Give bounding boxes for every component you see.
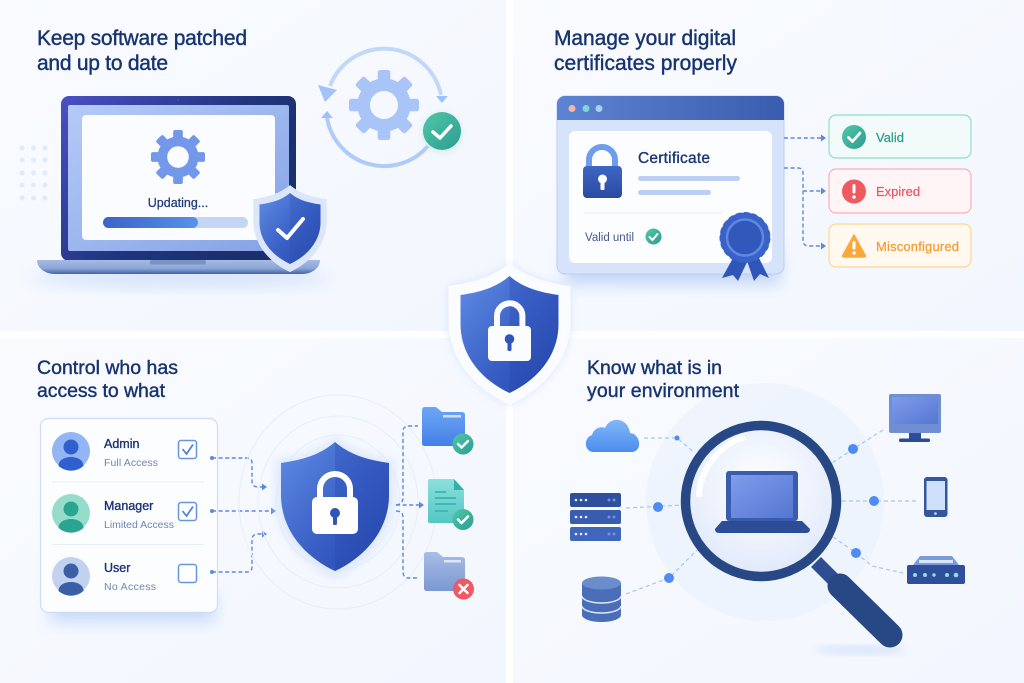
- icon: server rack: [570, 493, 621, 541]
- valid until label: Valid until: [585, 232, 634, 244]
- connectors: users to shield: [210, 456, 276, 574]
- row: manager: [52, 494, 196, 533]
- panel: control access: [37, 357, 474, 622]
- heading: know your environment: Know what is in: [587, 357, 722, 379]
- status: expired: [829, 169, 971, 213]
- status: valid: [829, 115, 971, 158]
- panel: know your environment: [570, 357, 965, 654]
- certificate title: Certificate: [638, 150, 710, 167]
- row: manager: Limited Access: [104, 519, 174, 531]
- shield rings: [239, 395, 437, 609]
- icon: database: [582, 576, 621, 622]
- central shield with lock: [448, 263, 571, 405]
- heading: control access: access to what: [37, 380, 166, 402]
- updating label: Updating...: [148, 196, 208, 210]
- status: valid: Valid: [876, 130, 904, 145]
- row: user: [52, 557, 196, 596]
- icon: cloud: [586, 420, 639, 452]
- icon: updating gear: [151, 130, 205, 184]
- row: user: No Access: [104, 581, 156, 593]
- device connectors: [626, 430, 919, 594]
- icon: denied folder: [424, 552, 474, 600]
- laptop ground shadow: [30, 269, 330, 287]
- status: misconfigured: Misconfigured: [876, 239, 959, 254]
- icon: network router: [907, 556, 965, 584]
- icon: desktop monitor: [889, 394, 941, 442]
- decorative dot grid: [20, 146, 48, 200]
- icon: ribbon seal: [720, 212, 770, 281]
- panel: keep software patched: [20, 27, 461, 287]
- panel: manage digital certificates: [554, 27, 971, 284]
- icon: padlock: [583, 147, 622, 198]
- row: user: User: [104, 561, 130, 575]
- magnifying glass: [686, 426, 890, 635]
- icon: phone: [924, 477, 948, 517]
- icon: shield with check: [253, 185, 327, 272]
- heading: know your environment: your environment: [587, 380, 740, 402]
- icon: allowed document: [428, 479, 474, 530]
- status connectors: [784, 134, 826, 250]
- heading: manage certificates: Manage your digital: [554, 27, 736, 50]
- user card shadow: [50, 590, 215, 622]
- icon: update cycle with gear: [318, 49, 461, 166]
- access shield with lock: [275, 436, 395, 579]
- heading: control access: Control who has: [37, 357, 178, 379]
- heading: keep software patched: Keep software patched: [37, 27, 247, 50]
- user access card: [40, 418, 218, 612]
- connectors: shield to resources: [396, 426, 424, 578]
- row: admin: Admin: [104, 437, 139, 451]
- row: admin: [52, 432, 196, 471]
- icon: valid check: [646, 228, 662, 244]
- status: misconfigured: [829, 224, 971, 267]
- heading: keep software patched: and up to date: [37, 52, 168, 75]
- certificate window shadow: [565, 250, 780, 284]
- scan halo: [646, 383, 884, 621]
- certificate window: [557, 96, 784, 281]
- handle shadow: [814, 646, 906, 654]
- row: manager: Manager: [104, 499, 153, 513]
- progress bar: [103, 217, 248, 228]
- heading: manage certificates: certificates properly: [554, 52, 738, 75]
- certificate text lines: [638, 176, 740, 195]
- row: admin: Full Access: [104, 457, 158, 469]
- icon: allowed folder: [422, 407, 474, 454]
- icon: laptop in lens: [715, 471, 810, 533]
- status: expired: Expired: [876, 184, 920, 199]
- laptop: [37, 96, 320, 274]
